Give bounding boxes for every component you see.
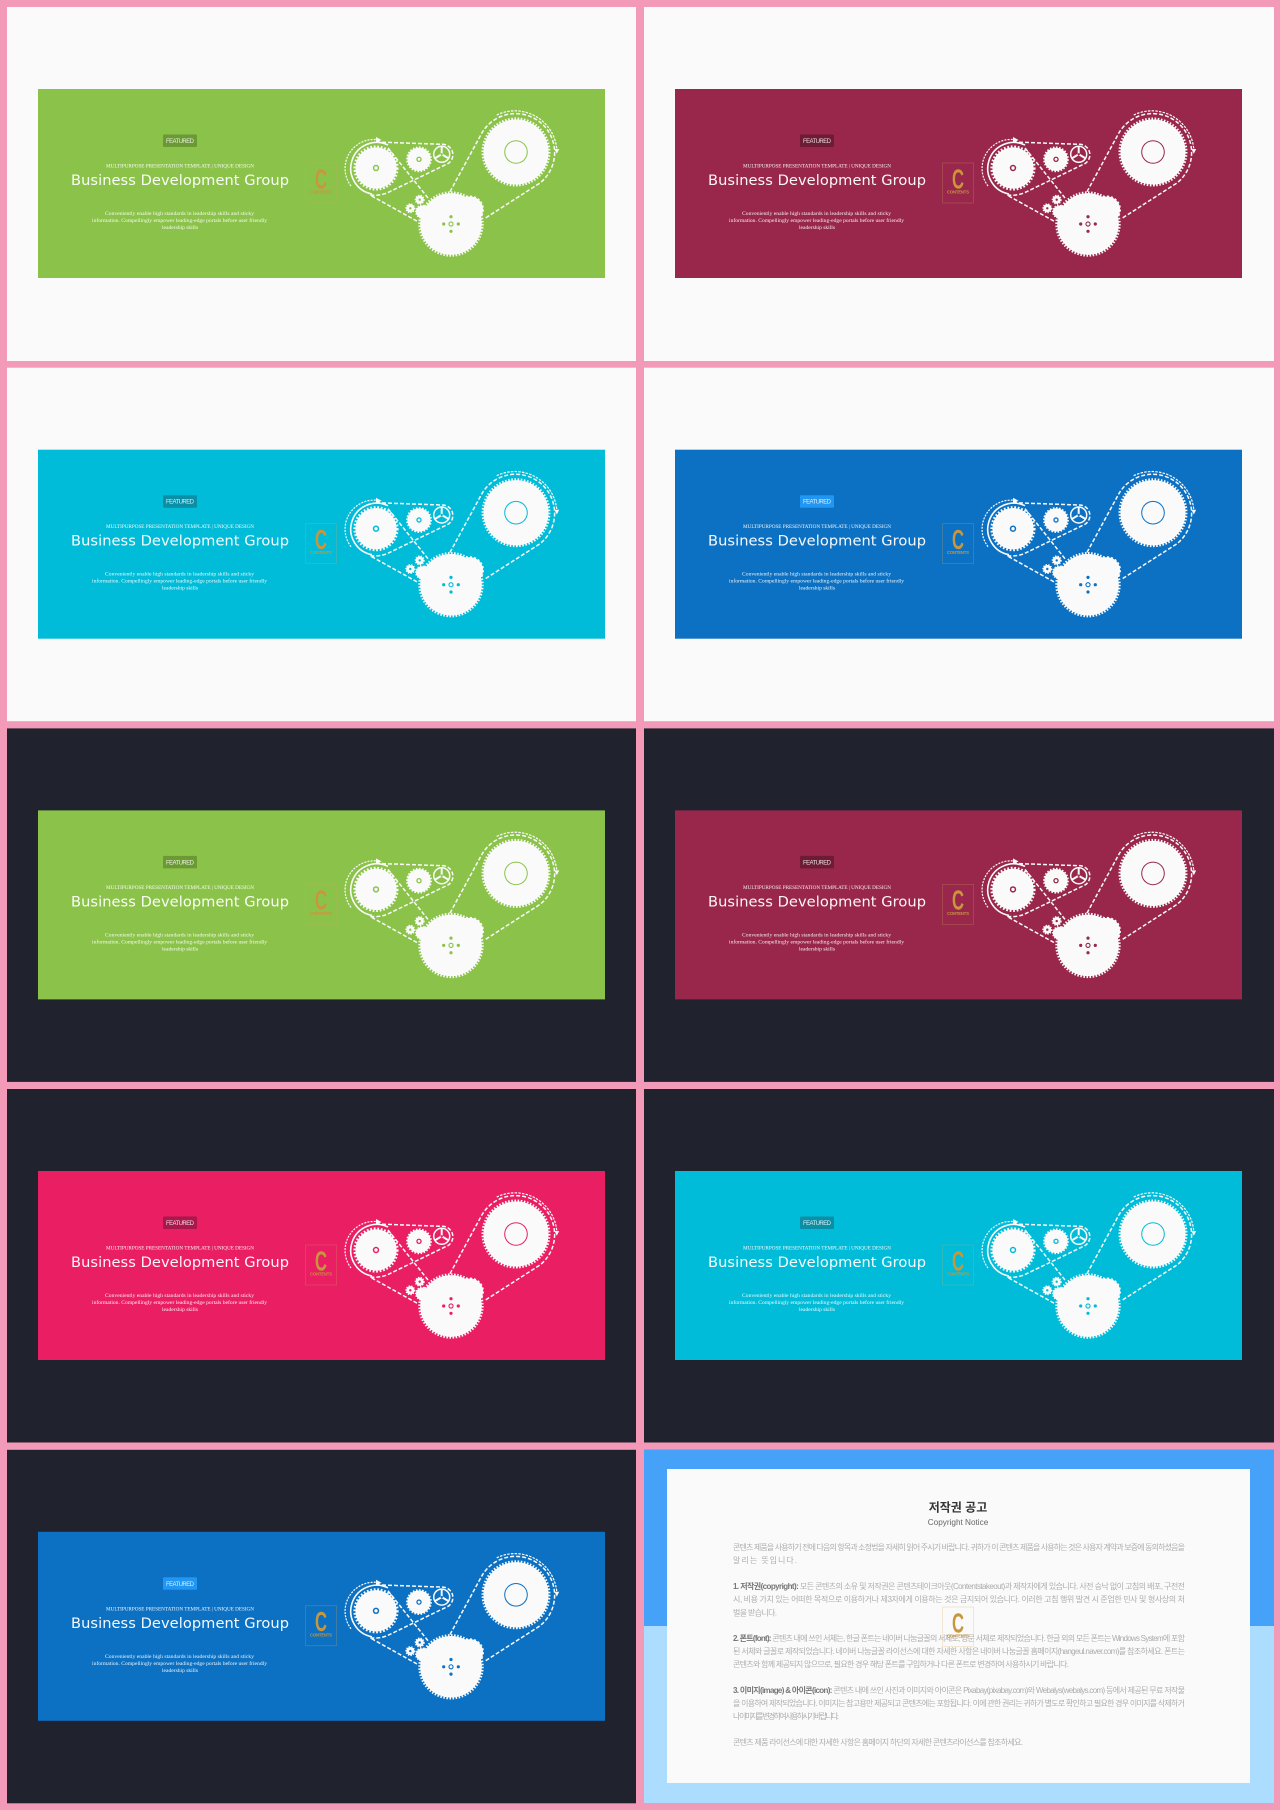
subtitle: MULTIPURPOSE PRESENTATION TEMPLATE | UNIQUE DESIGN bbox=[106, 524, 254, 530]
logo: CONTENTS bbox=[310, 190, 332, 194]
title: Business Development Group bbox=[71, 893, 289, 910]
logo: CONTENTS bbox=[310, 911, 332, 916]
logo bbox=[306, 1606, 336, 1646]
panel: copyright notice bbox=[644, 1450, 1274, 1803]
gears and belts bbox=[345, 832, 559, 976]
body text: leadership skills bbox=[799, 225, 835, 231]
gears and belts bbox=[345, 111, 559, 255]
notice section 1: 시, 비용 가치 있는 어떠한 목적으로 이용하거나 제3자에게 이용하는 것은 금지되어 있습니다. 이러한 고침 행위 발견 시 준엄한 민사 및 형사상의 처 bbox=[733, 1594, 1185, 1604]
logo: C bbox=[315, 163, 327, 194]
body text bbox=[729, 211, 904, 231]
body text: Conveniently enable high standards in leadership skills and sticky bbox=[742, 1293, 891, 1299]
subtitle: MULTIPURPOSE PRESENTATION TEMPLATE | UNIQUE DESIGN bbox=[106, 1246, 254, 1252]
logo bbox=[306, 524, 336, 564]
logo: CONTENTS bbox=[947, 1634, 969, 1638]
title: Business Development Group bbox=[708, 1254, 926, 1271]
badge: featured: FEATURED bbox=[803, 500, 832, 506]
subtitle: MULTIPURPOSE PRESENTATION TEMPLATE | UNIQUE DESIGN bbox=[743, 524, 891, 530]
logo bbox=[942, 1245, 974, 1285]
panel: light green bbox=[7, 7, 636, 361]
body text: information. Compellingly empower leading-edge portals before user friendly bbox=[729, 938, 904, 945]
body text: Conveniently enable high standards in leadership skills and sticky bbox=[105, 932, 254, 938]
badge: featured bbox=[800, 495, 834, 508]
badge: featured bbox=[163, 856, 197, 868]
badge: featured: FEATURED bbox=[803, 139, 832, 145]
panel: dark cyan bbox=[644, 1089, 1274, 1442]
body text: leadership skills bbox=[162, 1307, 198, 1313]
badge: featured bbox=[800, 134, 834, 147]
logo bbox=[306, 163, 336, 203]
body text bbox=[92, 572, 267, 592]
badge: featured bbox=[163, 495, 197, 508]
body text: Conveniently enable high standards in leadership skills and sticky bbox=[105, 1654, 254, 1660]
logo: C bbox=[952, 1607, 964, 1638]
logo: C bbox=[315, 524, 327, 555]
logo: CONTENTS bbox=[310, 1632, 332, 1637]
title: Business Development Group bbox=[708, 893, 926, 910]
notice intro: 콘텐츠 제품을 사용하기 전에 다음의 항목과 소정법을 자세히 읽어 주시기 바랍니다. 귀하가 이 콘텐츠 제품을 사용하는 것은 사용자 계약과 보증에 동의하셨음을 bbox=[733, 1542, 1185, 1552]
body text bbox=[92, 1654, 267, 1674]
panel: dark maroon bbox=[644, 728, 1274, 1082]
notice subheading: Copyright Notice bbox=[928, 1518, 989, 1527]
gears and belts bbox=[345, 1554, 559, 1698]
notice intro: 알리는 뜻입니다. bbox=[733, 1555, 797, 1565]
body text bbox=[729, 932, 904, 952]
notice section 3 bbox=[733, 1685, 1185, 1721]
logo bbox=[942, 884, 974, 924]
gears and belts bbox=[345, 472, 559, 615]
logo bbox=[942, 163, 974, 203]
gears and belts bbox=[982, 832, 1196, 976]
badge: featured: FEATURED bbox=[166, 1221, 195, 1227]
panel: light maroon bbox=[644, 7, 1274, 361]
notice section 3: 3. 이미지(image) & 아이콘(icon): 콘텐츠 내에 쓰인 사진과 이미지와 아이콘은 Pixabay(pixabay.com)와 Webalys(webalys.com) 등에서 제공된 무료 저작물 bbox=[733, 1685, 1185, 1695]
body text: Conveniently enable high standards in leadership skills and sticky bbox=[742, 211, 891, 217]
logo bbox=[306, 884, 336, 924]
subtitle: MULTIPURPOSE PRESENTATION TEMPLATE | UNIQUE DESIGN bbox=[743, 885, 891, 891]
body text: leadership skills bbox=[799, 946, 835, 952]
badge: featured: FEATURED bbox=[166, 860, 195, 866]
body text: leadership skills bbox=[162, 586, 198, 592]
subtitle: MULTIPURPOSE PRESENTATION TEMPLATE | UNIQUE DESIGN bbox=[106, 1606, 254, 1612]
body text bbox=[92, 1293, 267, 1313]
body text: leadership skills bbox=[799, 1307, 835, 1313]
title: Business Development Group bbox=[71, 533, 289, 550]
logo: C bbox=[315, 885, 327, 916]
body text: information. Compellingly empower leading-edge portals before user friendly bbox=[92, 1299, 267, 1306]
logo: C bbox=[315, 1606, 327, 1637]
title: Business Development Group bbox=[708, 533, 926, 550]
subtitle: MULTIPURPOSE PRESENTATION TEMPLATE | UNIQUE DESIGN bbox=[743, 1246, 891, 1252]
panel: dark blue bbox=[7, 1450, 636, 1803]
body text bbox=[92, 211, 267, 231]
body text: information. Compellingly empower leading-edge portals before user friendly bbox=[729, 1299, 904, 1306]
badge: featured bbox=[163, 1577, 197, 1590]
gears and belts bbox=[345, 1193, 559, 1337]
notice section 3: 나 이미지를 변경하여 사용하시기 바랍니다. bbox=[733, 1711, 839, 1721]
body text: Conveniently enable high standards in leadership skills and sticky bbox=[105, 1293, 254, 1299]
badge: featured: FEATURED bbox=[803, 1221, 832, 1227]
subtitle: MULTIPURPOSE PRESENTATION TEMPLATE | UNIQUE DESIGN bbox=[743, 164, 891, 170]
logo: C bbox=[952, 1245, 964, 1276]
notice section 1: 1. 저작권(copyright): 모든 콘텐츠의 소유 및 저작권은 콘텐츠테이크아웃(Contentstakeout)과 제작자에게 있습니다. 사전 승낙 없이 고침의 배포, 구전전 bbox=[733, 1581, 1185, 1591]
notice section 1 bbox=[733, 1581, 1185, 1618]
notice heading: 저작권 공고 bbox=[929, 1500, 987, 1514]
notice intro bbox=[733, 1542, 1185, 1565]
subtitle: MULTIPURPOSE PRESENTATION TEMPLATE | UNIQUE DESIGN bbox=[106, 164, 254, 170]
title: Business Development Group bbox=[71, 172, 289, 189]
body text: leadership skills bbox=[162, 225, 198, 231]
badge: featured bbox=[163, 1216, 197, 1229]
body text: leadership skills bbox=[799, 586, 835, 592]
logo: CONTENTS bbox=[310, 550, 332, 555]
gears and belts bbox=[982, 1193, 1196, 1337]
gears and belts bbox=[982, 111, 1196, 255]
badge: featured: FEATURED bbox=[166, 139, 195, 145]
body text: Conveniently enable high standards in leadership skills and sticky bbox=[742, 572, 891, 578]
logo: C bbox=[952, 885, 964, 916]
body text: leadership skills bbox=[162, 1668, 198, 1674]
badge: featured bbox=[800, 1216, 834, 1229]
panel: dark pink bbox=[7, 1089, 636, 1442]
badge: featured bbox=[163, 134, 197, 147]
body text: information. Compellingly empower leading-edge portals before user friendly bbox=[729, 578, 904, 585]
body text bbox=[92, 932, 267, 952]
logo: CONTENTS bbox=[947, 911, 969, 916]
notice section 1: 벌을 받습니다. bbox=[733, 1608, 777, 1618]
notice section 2: 콘텐츠와 함께 제공되지 않으므로, 필요한 경우 해당 폰트를 구입하거나 다른 폰트로 변경하여 사용하시기 바랍니다. bbox=[733, 1659, 1069, 1669]
notice section 2: 2. 폰트(font): 콘텐츠 내에 쓰인 서체는, 한글 폰트는 네이버 나눔글꼴의 서체로, 영문 서체로 제작되었습니다. 한글 외의 모든 폰트는 Windows System에 포함 bbox=[733, 1633, 1186, 1643]
body text: Conveniently enable high standards in leadership skills and sticky bbox=[105, 211, 254, 217]
notice closing: 콘텐츠 제품 라이선스에 대한 자세한 사항은 홈페이지 하단의 자세한 콘텐츠라이선스를 참조하세요. bbox=[733, 1737, 1023, 1747]
subtitle: MULTIPURPOSE PRESENTATION TEMPLATE | UNIQUE DESIGN bbox=[106, 885, 254, 891]
logo: CONTENTS bbox=[947, 550, 969, 555]
logo: C bbox=[952, 524, 964, 555]
logo: CONTENTS bbox=[310, 1272, 332, 1276]
logo bbox=[942, 1607, 974, 1646]
notice section 2 bbox=[733, 1633, 1186, 1669]
badge: featured: FEATURED bbox=[166, 500, 195, 506]
gears and belts bbox=[982, 472, 1196, 615]
logo: C bbox=[952, 163, 964, 194]
body text: Conveniently enable high standards in leadership skills and sticky bbox=[742, 932, 891, 938]
body text bbox=[729, 1293, 904, 1313]
body text: information. Compellingly empower leading-edge portals before user friendly bbox=[92, 217, 267, 224]
logo bbox=[942, 524, 974, 564]
body text: information. Compellingly empower leading-edge portals before user friendly bbox=[92, 578, 267, 585]
body text: Conveniently enable high standards in leadership skills and sticky bbox=[105, 572, 254, 578]
title: Business Development Group bbox=[71, 1254, 289, 1271]
panel: light cyan bbox=[7, 368, 636, 721]
panel: dark green bbox=[7, 728, 636, 1082]
body text: leadership skills bbox=[162, 946, 198, 952]
notice section 2: 된 서체와 글꼴로 제작되었습니다. 네이버 나눔글꼴 라이선스에 대한 자세한 사항은 네이버 나눔글꼴 홈페이지(hangeul.naver.com)를 참조하세요. 폰트는 bbox=[733, 1646, 1185, 1656]
notice section 3: 을 이용하여 제작되었습니다. 이미지는 참고용만 제공되고 콘텐츠에는 포함됩니다. 이에 관한 권리는 귀하가 별도로 확인하고 필요한 경우 이미지를 삭제하거 bbox=[733, 1698, 1185, 1708]
logo: CONTENTS bbox=[947, 1272, 969, 1276]
logo bbox=[306, 1245, 336, 1285]
body text: information. Compellingly empower leading-edge portals before user friendly bbox=[92, 938, 267, 945]
title: Business Development Group bbox=[708, 172, 926, 189]
badge: featured bbox=[800, 856, 834, 868]
badge: featured: FEATURED bbox=[166, 1582, 195, 1588]
logo: C bbox=[315, 1245, 327, 1276]
badge: featured: FEATURED bbox=[803, 860, 832, 866]
logo: CONTENTS bbox=[947, 190, 969, 194]
body text: information. Compellingly empower leading-edge portals before user friendly bbox=[729, 217, 904, 224]
body text bbox=[729, 572, 904, 592]
body text: information. Compellingly empower leading-edge portals before user friendly bbox=[92, 1660, 267, 1667]
title: Business Development Group bbox=[71, 1615, 289, 1632]
panel: light blue bbox=[644, 368, 1274, 721]
